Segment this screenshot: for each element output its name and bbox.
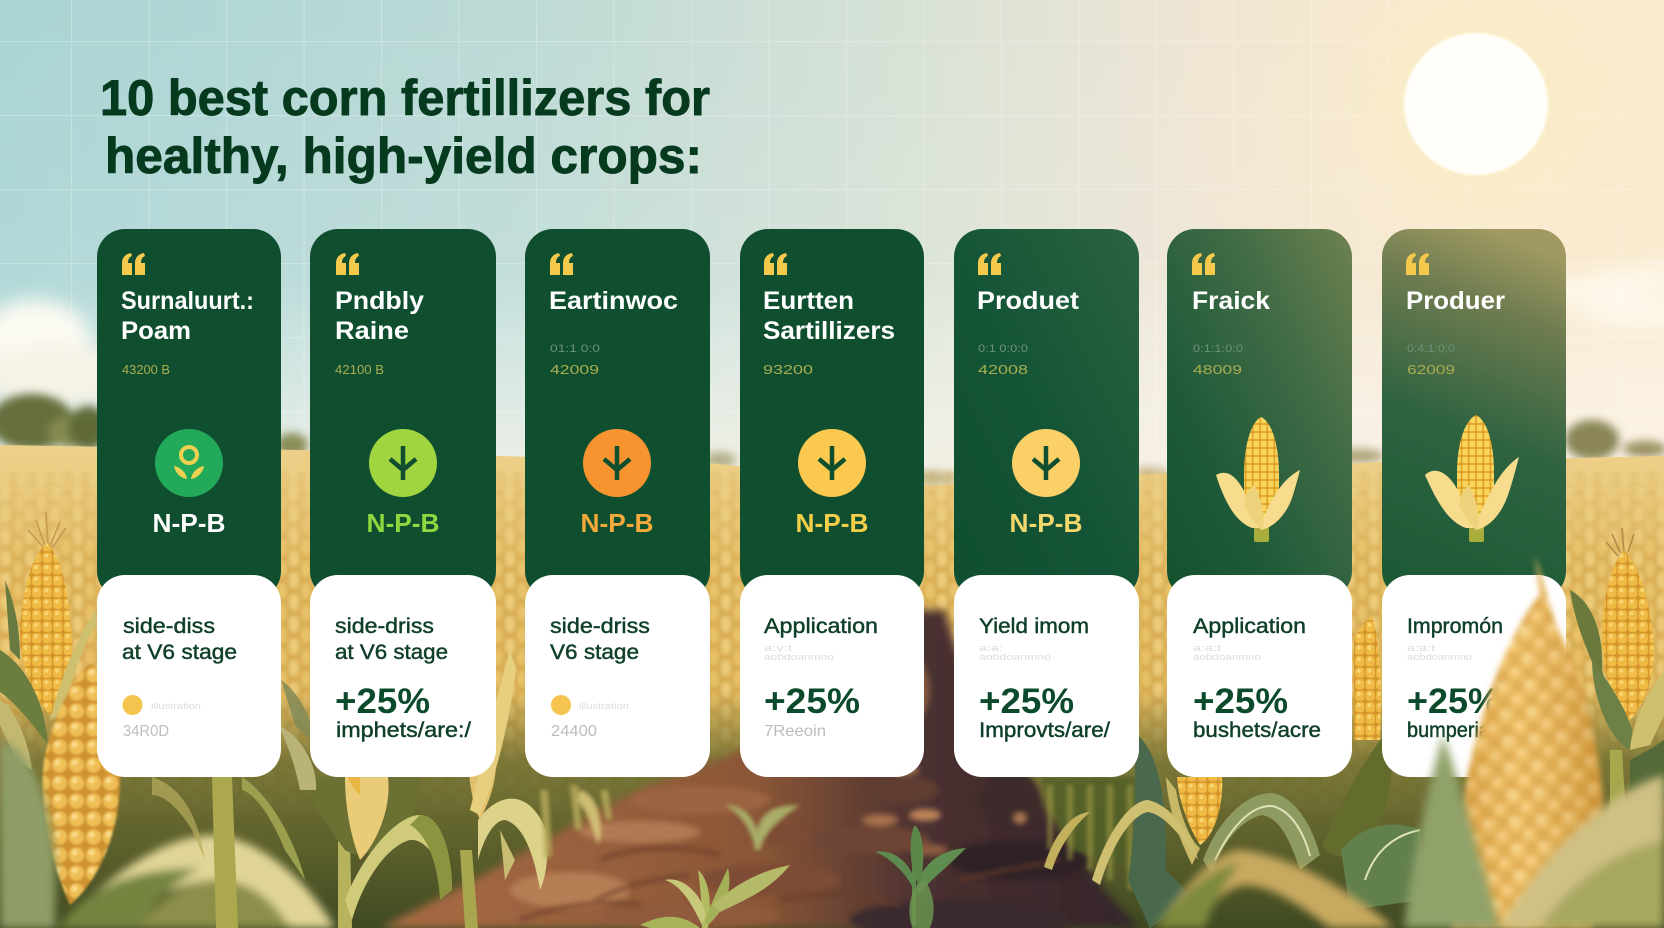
title	[100, 70, 710, 184]
card 5 heading: Yield imom	[979, 615, 1089, 638]
card 3 application text: V6 stage	[550, 641, 639, 664]
card 7 faint lines: a:a:t	[1407, 643, 1436, 653]
card 2 quote mark	[336, 253, 359, 275]
card 3 faint label: illustration	[579, 701, 629, 711]
card 4 white panel	[740, 575, 924, 777]
card 6 quote mark	[1192, 253, 1215, 275]
card 6 faint lines: a:a:t	[1193, 643, 1222, 653]
card 1 quote mark	[122, 253, 145, 275]
card 1 status dot	[122, 695, 142, 715]
seedling: far blurred	[725, 805, 800, 850]
card 2 application text: side-driss	[335, 615, 434, 638]
card 3 small code: 42009	[550, 362, 599, 377]
plant: arching leaves center left	[278, 650, 547, 928]
card 6 name: Fraick	[1192, 287, 1270, 315]
card 1 white panel	[97, 575, 281, 777]
background: clouds	[0, 257, 1664, 405]
card 3: Eartinwoc	[525, 229, 710, 777]
card 6 green panel	[1167, 229, 1352, 599]
card 3 name: Eartinwoc	[549, 287, 678, 315]
card 4 name: Sartillizers	[763, 317, 895, 345]
card 2 name: Pndbly	[335, 287, 424, 315]
card 1 small code: 43200 B	[122, 362, 170, 377]
background: soil path	[380, 610, 1140, 928]
card 5 yield figure: +25%	[979, 682, 1074, 721]
card 4 heading: Application	[764, 615, 878, 638]
card 3 quote mark	[550, 253, 573, 275]
background: distant trees	[0, 394, 1664, 484]
card 1 green panel	[97, 229, 281, 599]
card 1 application text: side-diss	[123, 615, 215, 638]
card 6 icon: corn	[1216, 417, 1300, 542]
card 4 green panel	[740, 229, 924, 599]
background: sky gradient	[0, 0, 1664, 500]
card 2 name: Raine	[335, 317, 409, 345]
card 1: Surnaluurt Poam	[97, 229, 281, 777]
card 2 green panel	[310, 229, 496, 599]
plant: left upright corn cob	[20, 512, 72, 715]
card 2 white panel	[310, 575, 496, 777]
card 5 small code: 42008	[978, 362, 1028, 377]
card 5 faint lines: a:a:	[979, 643, 1003, 653]
plant: left dark leaves	[0, 580, 96, 770]
seedling: near left	[640, 865, 790, 928]
card 7 faint line: 0:4:1:0:0	[1407, 343, 1455, 355]
card 4 quote mark	[764, 253, 787, 275]
card 5 yield unit: Improvts/are/	[979, 719, 1110, 742]
foreground: blurred leaves right	[1155, 735, 1664, 928]
card 4 small code: 93200	[763, 362, 813, 377]
card 5 icon: arrow	[1012, 429, 1080, 497]
background: sun glow and disk	[1156, 0, 1664, 424]
card 4 N-P-B: N-P-B	[796, 508, 868, 538]
plant: left foreground leaves	[0, 740, 335, 928]
plant: stalks behind cards	[152, 775, 420, 928]
card 4 gray value: 7Reeoin	[764, 723, 826, 740]
card 3 faint line: 01:1 0:0	[550, 343, 600, 355]
card 3 green panel	[525, 229, 710, 599]
card 4 name: Eurtten	[763, 287, 854, 315]
title line 2: healthy, high-yield crops:	[105, 128, 702, 184]
card 2 yield unit: imphets/are:/	[336, 719, 471, 742]
card 4 icon: arrow	[798, 429, 866, 497]
plant: pale stalks near soil	[540, 785, 612, 860]
card 7 faint lines: aobdoanmno	[1407, 652, 1472, 662]
card 7 small code: 62009	[1407, 362, 1455, 377]
card 1 N-P-B: N-P-B	[152, 508, 226, 538]
plant: right arching leaves	[1044, 793, 1320, 885]
card 6 faint line: 0:1:1:0:0	[1193, 343, 1243, 355]
card 3 N-P-B: N-P-B	[580, 508, 654, 538]
card 6 yield unit: bushets/acre	[1193, 719, 1321, 742]
card 5 faint line: 0:1 0:0:0	[978, 343, 1028, 355]
card 1 icon: sprout	[155, 429, 223, 497]
card 1 gray value: 34R0D	[123, 723, 169, 740]
plant: right cob behind card 6	[1354, 617, 1381, 740]
card 5 N-P-B: N-P-B	[1010, 508, 1082, 538]
card 3 application text: side-driss	[550, 615, 650, 638]
background: dark stalk band	[0, 690, 1664, 928]
seedling: right dark	[875, 825, 966, 928]
plant: right dark blade stalks	[1040, 777, 1140, 890]
card 6 yield figure: +25%	[1193, 682, 1288, 721]
card 7 icon: corn	[1425, 415, 1519, 542]
card 7 name: Produer	[1406, 287, 1505, 315]
card 7 heading: Impromón	[1407, 615, 1503, 638]
card 4: Eurtten Sartillizers	[740, 229, 924, 777]
card 4 faint lines: a:v:t	[764, 643, 793, 653]
title line 1: 10 best corn fertillizers for	[100, 70, 710, 126]
card 1 faint label: illustration	[151, 701, 201, 711]
card 2 icon: arrow	[369, 429, 437, 497]
card 7 green panel	[1382, 229, 1566, 599]
card 3 white panel	[525, 575, 710, 777]
card 7 yield figure: +25%	[1407, 682, 1500, 721]
card 4 faint lines: aobdoanmno	[764, 652, 834, 662]
card 7 quote mark	[1406, 253, 1429, 275]
card 3 status dot	[551, 695, 571, 715]
card 6 small code: 48009	[1193, 362, 1242, 377]
card 7: Produer	[1382, 229, 1566, 777]
card 2 yield figure: +25%	[335, 682, 430, 721]
plant: left blurred cob	[42, 662, 120, 905]
card 7 white panel	[1382, 575, 1566, 777]
card 6 faint lines: aobdoanmno	[1193, 652, 1261, 662]
plant: right dark leaf	[1322, 727, 1421, 910]
card 5 green panel	[954, 229, 1139, 599]
card 7 yield unit: bumperia	[1407, 719, 1490, 742]
card 5 name: Produet	[977, 287, 1080, 315]
background: golden corn field	[0, 445, 1664, 852]
plant: right teal leaf	[1128, 733, 1195, 928]
background: grid overlay	[0, 0, 1664, 470]
card 2 application text: at V6 stage	[335, 641, 448, 664]
card 6 heading: Application	[1193, 615, 1306, 638]
card 1 application text: at V6 stage	[122, 641, 237, 664]
card 5 white panel	[954, 575, 1139, 777]
card 1 name: Surnaluurt.:	[121, 287, 254, 315]
card 3 icon: arrow	[583, 429, 651, 497]
card 3 gray value: 24400	[551, 723, 597, 740]
plant: right cob below cards	[1166, 777, 1222, 865]
plant: right upright corn cob	[1602, 528, 1654, 722]
card 6 white panel	[1167, 575, 1352, 777]
card 5: Produet	[954, 229, 1139, 777]
card 2: Pndbly Raine	[310, 229, 496, 777]
card 2 N-P-B: N-P-B	[366, 508, 440, 538]
foreground: large blurred corn cob	[1452, 555, 1604, 928]
card 2 small code: 42100 B	[335, 362, 384, 377]
card 5 quote mark	[978, 253, 1001, 275]
card 5 faint lines: aobdoanmno	[979, 652, 1051, 662]
card 1 name: Poam	[121, 317, 191, 345]
plant: right side leaves	[1570, 590, 1664, 880]
card 6: Fraick	[1167, 229, 1352, 777]
card 4 yield figure: +25%	[764, 682, 860, 721]
